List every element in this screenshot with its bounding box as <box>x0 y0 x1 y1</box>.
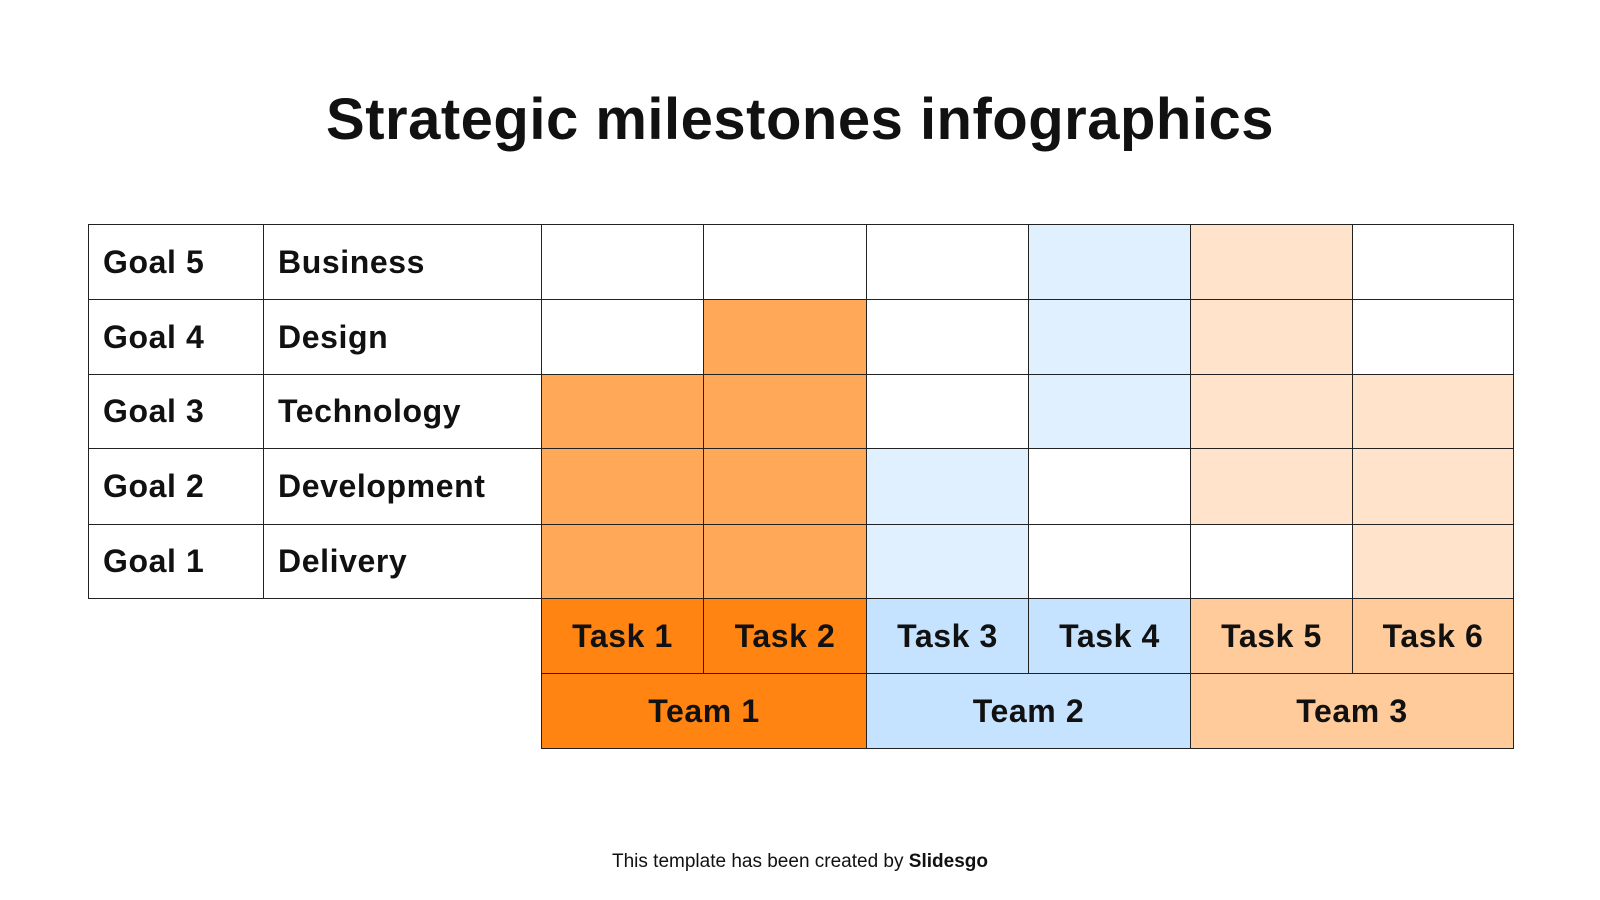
row: goal 4 <box>88 300 1514 374</box>
table: Goal 1 <box>103 543 204 579</box>
table: Task 6 <box>1383 618 1483 654</box>
table: Development <box>278 468 486 504</box>
table: Goal 3 <box>103 393 204 429</box>
table: Team 3 <box>1296 692 1408 728</box>
table: Task 3 <box>897 618 998 654</box>
table: Goal 5 <box>103 244 204 280</box>
row: goal 5 <box>88 224 1514 299</box>
title: Strategic milestones infographics <box>326 87 1274 152</box>
table: Team 2 <box>973 692 1084 728</box>
table: Design <box>278 318 388 354</box>
table: Task 1 <box>572 618 673 654</box>
table: Team 1 <box>648 692 760 728</box>
table: Business <box>278 244 425 280</box>
task labels <box>541 599 1514 673</box>
table: Technology <box>278 393 461 429</box>
table: Delivery <box>278 543 407 579</box>
table: Goal 2 <box>103 468 204 504</box>
footer: This template has been created by Slidesgo <box>612 851 988 872</box>
table: Task 2 <box>735 618 835 654</box>
table: Goal 4 <box>103 318 204 354</box>
team labels <box>541 674 1514 749</box>
table: Task 5 <box>1221 618 1322 654</box>
row: goal 3 <box>88 375 1514 448</box>
row: goal 1 <box>88 525 1514 599</box>
table: Task 4 <box>1059 618 1160 654</box>
row: goal 2 <box>88 449 1514 524</box>
